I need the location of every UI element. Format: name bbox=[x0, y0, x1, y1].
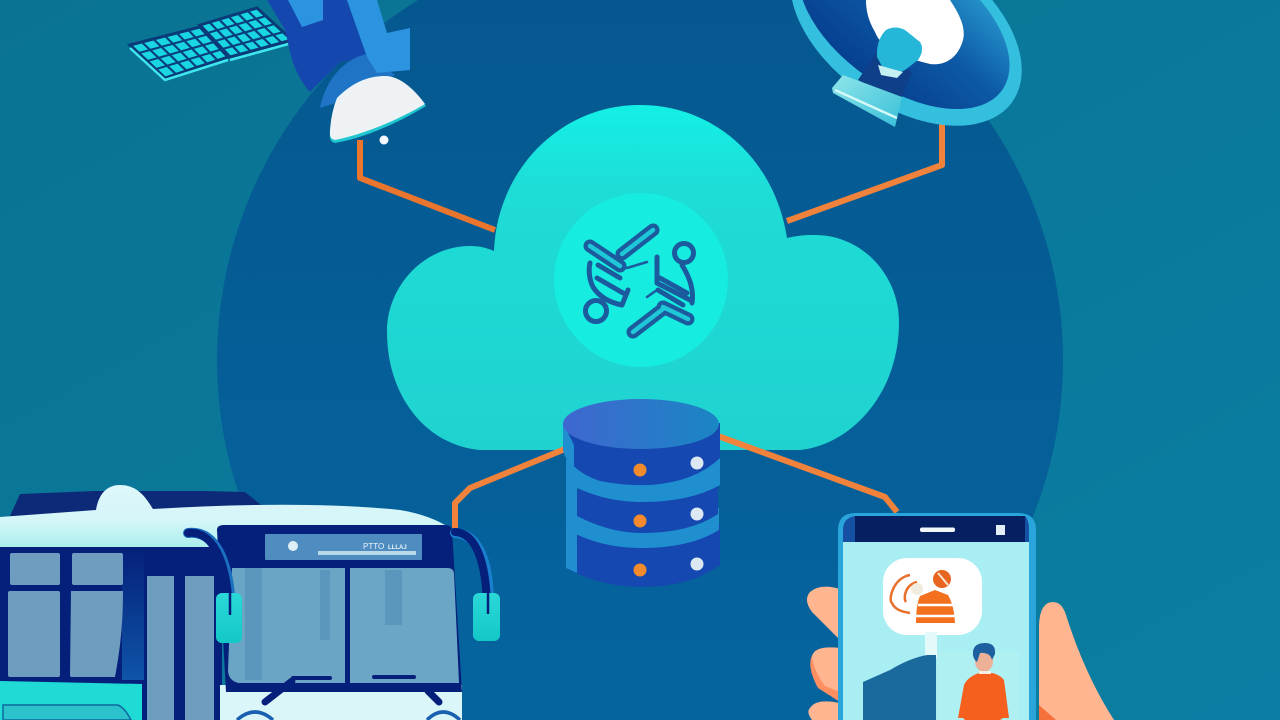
speech bubble with icon bbox=[883, 558, 982, 658]
person panel bbox=[937, 651, 1019, 720]
database top ellipse bbox=[563, 399, 719, 449]
side panel bbox=[0, 547, 222, 720]
left mirror bbox=[188, 533, 242, 643]
database stack bbox=[563, 399, 720, 587]
upper band bbox=[566, 455, 720, 502]
bus front lower body bbox=[220, 685, 462, 720]
upper orange connector lines bbox=[360, 116, 942, 230]
destination sign: PTTO bbox=[363, 542, 384, 551]
headlights bbox=[237, 712, 460, 720]
bus bbox=[0, 485, 500, 720]
dish feed horn bbox=[877, 28, 922, 74]
top tier bbox=[563, 423, 720, 485]
bus front frame bbox=[217, 525, 462, 692]
dark blue map shape bbox=[863, 655, 936, 720]
side windows bbox=[8, 553, 214, 720]
large dark circle backdrop bbox=[217, 0, 1063, 720]
dish arm bbox=[858, 50, 912, 102]
cloud bbox=[387, 105, 899, 450]
right mirror bbox=[455, 532, 500, 641]
phone header bbox=[843, 516, 1029, 542]
left fingers bbox=[807, 587, 840, 720]
roof unit bbox=[10, 491, 265, 516]
dish mount plate bbox=[832, 75, 902, 127]
right thumb bbox=[1039, 602, 1114, 720]
smartphone in hand bbox=[807, 513, 1114, 720]
satellite lamp dome bbox=[330, 76, 426, 143]
lower teal panel bbox=[0, 681, 142, 720]
satellite dish bbox=[754, 0, 1058, 166]
windshield bbox=[228, 568, 459, 683]
network glyph icon bbox=[586, 230, 694, 332]
phone frame bbox=[838, 513, 1036, 720]
lower orange connector lines bbox=[455, 436, 897, 528]
person figure bbox=[958, 643, 1009, 720]
phone screen bbox=[843, 542, 1029, 720]
bottom tier bbox=[566, 525, 720, 587]
solar panels bbox=[130, 8, 292, 80]
lower band bbox=[568, 508, 719, 548]
wipers bbox=[265, 677, 439, 702]
satellite body bbox=[267, 0, 367, 92]
middle tier bbox=[577, 480, 718, 533]
dish white center bbox=[866, 0, 964, 64]
cloud icon circle bbox=[554, 193, 728, 367]
status lights bbox=[634, 456, 704, 576]
roof bbox=[0, 485, 450, 548]
destination sign: LLLAJ bbox=[388, 545, 407, 551]
satellite bbox=[130, 0, 426, 144]
destination sign bbox=[265, 534, 422, 560]
